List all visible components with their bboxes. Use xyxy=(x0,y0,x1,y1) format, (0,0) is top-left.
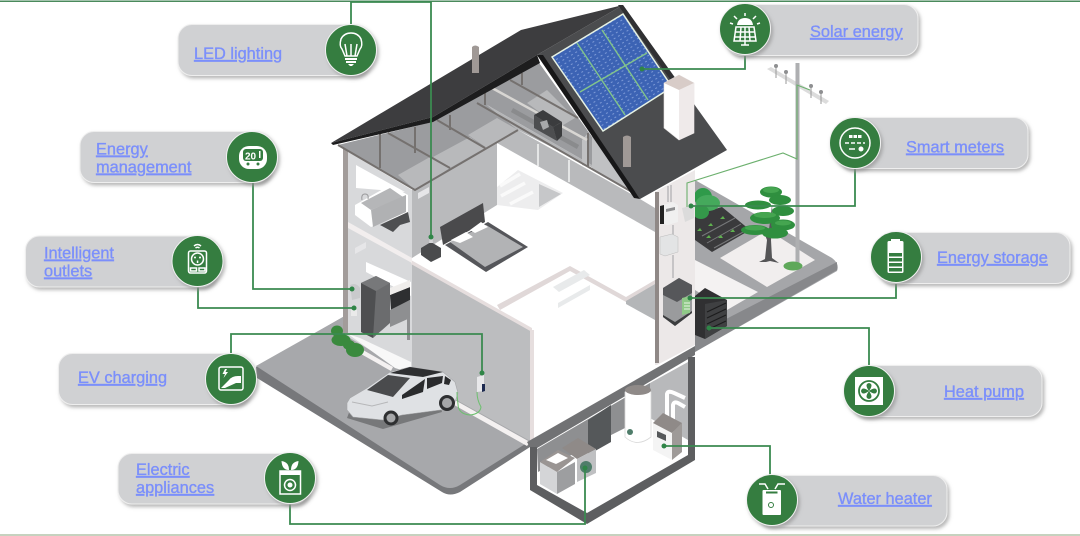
icon: solar panel and sun xyxy=(730,13,760,45)
connector: heat pump xyxy=(706,326,869,366)
attic under roof xyxy=(338,60,632,280)
label: Electric xyxy=(136,461,190,479)
connector: energy management xyxy=(253,183,354,292)
chimney xyxy=(664,75,694,140)
basement xyxy=(527,346,695,524)
utility pole xyxy=(767,63,829,270)
car xyxy=(347,367,458,429)
left wall post xyxy=(343,148,348,333)
EV charger and cable xyxy=(457,375,485,415)
bottom border line xyxy=(0,534,1080,536)
icon: battery xyxy=(888,239,904,273)
label: EV charging xyxy=(78,369,167,387)
icon: thermostat: 20 xyxy=(245,152,257,162)
icon: smart outlet xyxy=(188,244,206,273)
label: Energy storage xyxy=(937,249,1048,267)
panel: Smart meters xyxy=(830,118,1028,168)
icon: green washer xyxy=(280,461,300,494)
connector: solar energy xyxy=(640,55,745,72)
connector: energy storage xyxy=(688,283,896,300)
bed and nightstand xyxy=(421,203,528,272)
panel: Heat pump xyxy=(844,366,1042,416)
illustration: smart home cutaway xyxy=(256,5,838,524)
right deck and garden xyxy=(693,180,838,352)
shrubs xyxy=(331,326,364,357)
connector: EV charging xyxy=(231,334,484,376)
connector: smart meters xyxy=(688,168,855,208)
panel: Solar energy xyxy=(720,4,918,56)
panel: EV charging xyxy=(58,354,256,404)
solar panel array xyxy=(552,14,672,131)
icon: smart meter xyxy=(840,128,870,158)
label line 2: appliances xyxy=(136,479,214,497)
connector: LED lighting xyxy=(351,2,434,240)
label: Water heater xyxy=(838,490,932,508)
icon: light bulb xyxy=(340,33,362,66)
connector: water heater xyxy=(662,444,770,475)
house interior base xyxy=(345,130,655,446)
roof vents xyxy=(472,46,631,167)
panel: Intelligent outlets xyxy=(26,236,223,287)
panel: LED lighting xyxy=(178,24,376,76)
label: Energy xyxy=(96,140,149,158)
inverter battery unit xyxy=(663,278,692,326)
label: Smart meters xyxy=(906,138,1004,156)
label: Intelligent xyxy=(44,244,114,262)
service drop wire xyxy=(687,85,810,207)
panel: Water heater xyxy=(746,474,947,526)
label: LED lighting xyxy=(194,45,282,63)
icon: thermostat xyxy=(239,146,267,169)
connector: intelligent outlets xyxy=(198,287,356,310)
panel: Energy management xyxy=(80,132,278,182)
icon: EV plug xyxy=(219,367,243,390)
roof xyxy=(331,5,727,199)
label line 2: outlets xyxy=(44,262,92,280)
label: Solar energy xyxy=(810,23,903,41)
panel: Energy storage xyxy=(870,232,1070,284)
label: Heat pump xyxy=(944,383,1024,401)
label line 2: management xyxy=(96,158,192,176)
right wall pillar xyxy=(655,170,695,365)
top border line xyxy=(0,0,1080,2)
connector: electric appliances xyxy=(290,466,588,524)
icon: water heater xyxy=(759,484,785,515)
panel: Electric appliances xyxy=(118,452,316,504)
tree xyxy=(741,186,795,263)
icon: fan xyxy=(855,377,883,405)
heat pump unit xyxy=(695,288,727,339)
driveway xyxy=(256,317,530,494)
left rooms: bath and kitchen xyxy=(348,165,429,373)
